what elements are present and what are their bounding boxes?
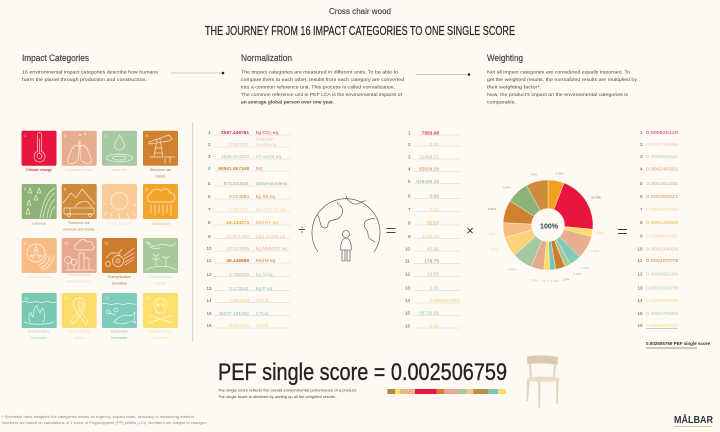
table: normalized results: 7553.08 [422, 130, 439, 136]
table: characterization results: m³ world eq [256, 154, 281, 160]
table: weighted results: 14 [638, 298, 643, 303]
icon: fossil resource use [143, 131, 178, 166]
label: human toxicity non-cancer: Human toxicity [149, 330, 172, 334]
table: normalized results: 1.61 [430, 286, 439, 292]
label: freshwater ecotoxicity: freshwater [111, 336, 129, 340]
chart percentage labels: 1.93% [596, 231, 604, 235]
operator: equals [618, 229, 627, 234]
table: normalized results: 0.00 [430, 324, 439, 330]
label: water use: Water use [112, 168, 127, 172]
operator: multiply: × [466, 223, 474, 238]
label: freshwater eutrophication: freshwater [31, 336, 48, 340]
table: weighted results: 3 [640, 154, 643, 159]
table: characterization results: Disease [256, 136, 274, 142]
table: weighted results: 0.000279565 [646, 311, 678, 317]
icon: particulate matter [62, 131, 97, 166]
table: weighted results: 15 [638, 311, 643, 316]
table: normalized results: 2 [408, 142, 411, 147]
label: marine eutrophication: marine [155, 282, 166, 286]
chart percentage labels: 7.84% [503, 186, 511, 190]
label: photochemical ozone formation: ozone formation [66, 280, 92, 284]
icon: human toxicity cancer: 14 [64, 296, 69, 300]
footnote [2, 415, 207, 425]
table: characterization results: 1829.474203 [221, 154, 249, 160]
table: normalized results: 11468.71 [419, 154, 439, 160]
label: human toxicity cancer: Human toxicity [68, 330, 91, 334]
table: normalized results: 1 [408, 130, 411, 136]
table: normalized results: 58716.59 [419, 310, 439, 316]
table: characterization results: incidence [256, 142, 277, 148]
label: acidification: Acidification [151, 222, 170, 226]
intro: weighting: their weighting factor*. [487, 84, 541, 90]
table: weighted results: 0.000095199 [646, 272, 678, 278]
label: freshwater eutrophication: Eutrophication [28, 330, 50, 334]
table: weighted results: 0.000161231 [646, 181, 678, 187]
table: normalized results: 7 [408, 207, 411, 212]
table: characterization results: 573.633041 [224, 181, 249, 187]
chart percentage labels: 3.40% [487, 232, 495, 236]
table: normalized results [405, 130, 460, 330]
table: normalized results: 4220.16 [422, 234, 439, 240]
chart percentage labels: 8.92% [488, 207, 496, 211]
table: weighted results: 16 [638, 323, 643, 328]
table: characterization results: 0.000321 [229, 142, 249, 148]
icon: mineral resource use [62, 184, 97, 219]
table: characterization results: kg CFC-11 eq [256, 207, 286, 213]
intro: weighting [487, 53, 638, 104]
table: normalized results: 5 [408, 179, 411, 184]
table: weighted results: 12 [638, 272, 643, 276]
chart percentage labels: 20.75% [591, 196, 601, 200]
table: normalized results: 11 [405, 258, 410, 264]
table: weighted results: 7 [640, 207, 643, 212]
table: normalized results: 55.57 [427, 220, 439, 226]
icon: globe with person [312, 196, 380, 261]
table: characterization results: 7 [208, 207, 211, 212]
subtitle: Cross chair wood [329, 7, 391, 16]
chart percentage labels: 4.35% [556, 172, 564, 176]
table: characterization results: 10 [206, 246, 212, 251]
score explanation: The single score reflects the overall environmental performance of a product. [218, 388, 357, 392]
table: normalized results: 4 [408, 166, 411, 172]
chart percentage labels: 3.7% [563, 278, 570, 282]
color strip of categories [387, 389, 506, 394]
table: normalized results: 0.0000017253 [429, 298, 460, 304]
label: mineral resource use: Resource use [68, 221, 90, 225]
table: characterization results: kg CO₂ eq [256, 130, 278, 136]
footnote: Numbers are based on calculations of 1 tonne of Polypropylene (PP) pellets (LCI). Numbers are subject to changes. [2, 421, 207, 425]
table: weighted results: 13 [638, 286, 643, 290]
headline score: PEF single score = 0.002506759 [218, 359, 507, 386]
label: fossil resource use: fossils [156, 174, 166, 178]
intro: weighting: Not all impact categories are considered equally important. To [487, 70, 631, 74]
intro: weighting: Weighting [487, 53, 523, 63]
intro: normalization: compare them to each other, results from each category are converted [241, 77, 405, 82]
chart center label: 100% [540, 224, 559, 230]
operator: divide: ÷ [298, 222, 306, 237]
table: normalized results: 19.55 [427, 272, 439, 278]
icon: human toxicity cancer [62, 293, 97, 328]
icon: acidification: 8 [146, 186, 148, 192]
label: mineral resource use: minerals and metals [63, 228, 95, 232]
table: normalized results: 6 [408, 194, 411, 198]
table: weighted results: 10 [638, 246, 643, 252]
icon: marine eutrophication [143, 238, 178, 273]
intro: impact categories: harm the planet through production and construction. [22, 77, 147, 82]
table: characterization results: Mol H+ eq [256, 220, 278, 226]
table: normalized results: 9 [408, 234, 411, 239]
table: characterization results: 3 [208, 154, 211, 159]
operator: equals [386, 228, 396, 233]
icon: land use [22, 184, 57, 219]
table: characterization results: MJ [256, 166, 263, 172]
score explanation: The single score is obtained by adding up all the weighted results. [218, 395, 336, 399]
table: characterization results: 8 [208, 220, 211, 225]
icon: freshwater eutrophication [22, 293, 57, 328]
table: normalized results: 0.05 [430, 207, 439, 213]
table: weighted results: 0.000023570 [646, 286, 678, 292]
intro: impact categories [22, 53, 159, 82]
icon: terrestrial eutrophication: 11 [104, 240, 109, 246]
table: weighted results: 8 [640, 220, 643, 225]
table: normalized results: 8 [408, 220, 411, 226]
table: characterization results: 16 [206, 323, 212, 328]
table: weighted results: 0.000249392 [646, 166, 678, 172]
chart percentage labels: 2.91% [582, 266, 590, 270]
icon: freshwater ecotoxicity: 15 [104, 296, 110, 300]
intro: normalization [241, 53, 405, 104]
table: weighted results: 0.000055442 [646, 154, 678, 160]
table: weighted results: 0.000068921 [646, 194, 678, 200]
table: characterization results: kg N eq [256, 272, 273, 278]
icon: climate change: 1 [24, 133, 27, 138]
divider [192, 122, 193, 342]
table: normalized results: 819496.18 [416, 179, 439, 185]
table: characterization results: kg P eq [256, 286, 273, 292]
illustration: chair [526, 355, 560, 408]
label: terrestrial eutrophication: terrestrial [112, 282, 127, 286]
table: weighted results: 5 [640, 181, 643, 186]
table: characterization results: 1 [208, 130, 211, 135]
label: marine eutrophication: Eutrophication [149, 275, 172, 279]
table: characterization results: 24.871985 [226, 234, 249, 240]
table: weighted results: 0.000002250 [646, 207, 678, 213]
label: human toxicity non-cancer: non-cancer [152, 336, 170, 340]
icon: terrestrial eutrophication [102, 238, 137, 273]
table: characterization results: CTUh [256, 298, 269, 304]
icon: ozone depletion: 7 [104, 186, 108, 192]
icon: particulate matter: 2 [64, 133, 67, 138]
table: normalized results: 12 [405, 272, 411, 276]
table: characterization results: CTUh [256, 323, 269, 329]
label: land use: Land use [32, 222, 46, 226]
icon: photochemical ozone formation: 10 [64, 240, 69, 246]
icon: marine eutrophication: 12 [146, 240, 151, 246]
table: characterization results: 12 [206, 272, 212, 277]
label: terrestrial eutrophication: Eutrophication [108, 275, 131, 279]
table: characterization results: 13 [206, 286, 212, 291]
icon: ionising radiation: 9 [24, 240, 27, 246]
label: freshwater ecotoxicity: Ecotoxicity [111, 330, 128, 334]
intro: normalization: Normalization [241, 53, 292, 63]
table: normalized results: 15 [405, 310, 411, 316]
table: characterization results: 0.000100 [229, 323, 249, 329]
table: characterization results: 4.758349 [229, 272, 249, 278]
table: characterization results: 5 [208, 181, 211, 186]
table: characterization results: 2 [208, 142, 211, 147]
label: ionising radiation: Ionising radiation [26, 275, 52, 279]
intro: impact categories: Impact Categories [22, 53, 89, 63]
icon: ozone depletion [102, 184, 137, 219]
chart percentage labels: 3.39% [530, 278, 538, 282]
icon: climate change [22, 131, 56, 166]
table: normalized results: 13 [405, 286, 411, 290]
table: characterization results: Dimensionless [256, 181, 288, 187]
intro: normalization: The impact categories are measured in different units. To be able to [241, 70, 398, 74]
intro: normalization: The common reference unit in PEF LCA is the environmental impacts of [241, 92, 403, 97]
table: normalized results: 14 [405, 298, 411, 303]
table: weighted results: 0.000057510 [646, 323, 678, 329]
table: weighted results: 0.000107279 [646, 258, 678, 264]
table: normalized results: 0.06 [430, 194, 439, 200]
title: THE JOURNEY FROM 16 IMPACT CATEGORIES TO ONE SINGLE SCORE [205, 24, 515, 38]
table: characterization results [206, 130, 290, 329]
icon: water use: 3 [104, 133, 108, 138]
intro: normalization: into a common reference unit. This process is called normalization. [241, 84, 395, 90]
label: photochemical ozone formation: Photochemical [68, 273, 91, 277]
table: characterization results: 45037.191032 [218, 311, 249, 317]
table: normalized results: 10 [405, 246, 411, 252]
icon: human toxicity non-cancer: 16 [146, 296, 151, 300]
label: particulate matter: Particulate matter [65, 168, 94, 172]
icon: freshwater eutrophication: 13 [24, 296, 29, 300]
footnote: * Scientists have weighted the categories based on urgency, impact scale, accuracy of measuring method. [2, 415, 195, 419]
table: weighted results: 9 [640, 234, 643, 238]
label: ozone depletion: Ozone depletion [107, 222, 132, 226]
score explanation [218, 388, 357, 399]
icon: fossil resource use: 4 [146, 133, 148, 138]
table: normalized results: 65004.26 [419, 166, 439, 172]
chart percentage labels: 7.00% [530, 172, 538, 176]
total: weighted sum [646, 341, 710, 348]
table: characterization results: 15 [206, 311, 212, 316]
table: weighted results: 4 [640, 166, 643, 172]
table: weighted results: 0.000276459 [646, 142, 678, 148]
icon: land use: 5 [24, 186, 27, 192]
table: characterization results: Mol N eq [256, 258, 276, 264]
table: characterization results: 6 [208, 194, 211, 199]
table: characterization results: 2587.449781 [221, 130, 249, 136]
intro: impact categories: 16 environmental impact categories describe how humans [22, 70, 159, 74]
chart percentage labels: 1.93% [574, 272, 582, 276]
icon: freshwater ecotoxicity [102, 293, 137, 328]
table: characterization results: 13.124335 [226, 246, 249, 252]
table: characterization results: 0.000021 [229, 207, 249, 213]
chart percentage labels: 1.61% [541, 279, 549, 283]
table: normalized results: 40.86 [427, 246, 439, 252]
icon: human toxicity non-cancer [143, 293, 178, 328]
icon: photochemical ozone formation [62, 238, 97, 273]
table: weighted results: 0.000520120 [646, 130, 678, 136]
table: weighted results: 0.000130509 [646, 220, 678, 226]
table: characterization results: kg Sb eq [256, 194, 275, 200]
chart: donut of weighted shares [503, 180, 593, 270]
table: normalized results: 3 [408, 154, 411, 160]
arrow: normalization to weighting [416, 73, 470, 76]
label: human toxicity cancer: cancer [74, 336, 85, 340]
table: characterization results: 0.173241 [229, 286, 249, 292]
icon: acidification [143, 184, 178, 219]
panel: impact category icons [22, 131, 178, 340]
table: normalized results: 0.00 [430, 142, 439, 148]
table: weighted results: 0.000144029 [646, 246, 678, 252]
icon: ionising radiation [22, 238, 57, 273]
table: characterization results: 0.000009 [229, 298, 249, 304]
intro: normalization: an average global person over one year. [241, 100, 334, 104]
table: weighted results [638, 130, 678, 329]
table: characterization results: CTUe [256, 311, 269, 317]
table: characterization results: kBq U-235 eq [256, 234, 286, 240]
table: characterization results: 11 [206, 258, 212, 263]
intro: weighting: Now, the product's impact on the environmental categories is [487, 92, 629, 97]
table: characterization results: 4 [208, 166, 211, 171]
table: weighted results: 2 [640, 142, 643, 147]
intro: weighting: get the weighted results, the normalized results are multiplied by [487, 77, 638, 82]
table: characterization results: 9 [208, 234, 211, 239]
icon: water use [102, 131, 137, 166]
table: weighted results: 1 [640, 130, 643, 135]
chart percentage labels: 1.60% [551, 279, 559, 283]
table: weighted results: 11 [638, 258, 643, 263]
table: characterization results: 14 [206, 298, 212, 303]
chart percentage labels [487, 172, 604, 283]
table: characterization results: 45.446988 [226, 258, 249, 264]
table: characterization results: 18.134373 [226, 220, 249, 226]
chart percentage labels: 8.69% [591, 249, 599, 253]
table: weighted results: 6 [640, 194, 643, 199]
chart percentage labels: 5.07% [490, 248, 498, 252]
intro: weighting: comparable. [487, 100, 516, 104]
label: fossil resource use: Resource use [150, 168, 171, 172]
table: normalized results: 16 [405, 324, 411, 328]
table: characterization results: 65561.867348 [218, 166, 249, 172]
table: normalized results: 176.75 [424, 258, 439, 264]
chart percentage labels: 8.41% [508, 268, 516, 272]
arrow: categories to normalization [171, 72, 224, 74]
label: climate change: Climate change [26, 168, 52, 172]
table: characterization results: kg NMVOC eq [256, 246, 287, 252]
total: weighted sum: 0.002506759 PEF single score [646, 341, 710, 347]
table: weighted results: 0.000054482 [646, 234, 678, 240]
logo: MÅLBAR [674, 413, 714, 426]
table: weighted results: 0.000038395 [646, 298, 678, 304]
table: characterization results: 0.014854 [229, 194, 249, 200]
icon: mineral resource use: 6 [64, 186, 67, 192]
